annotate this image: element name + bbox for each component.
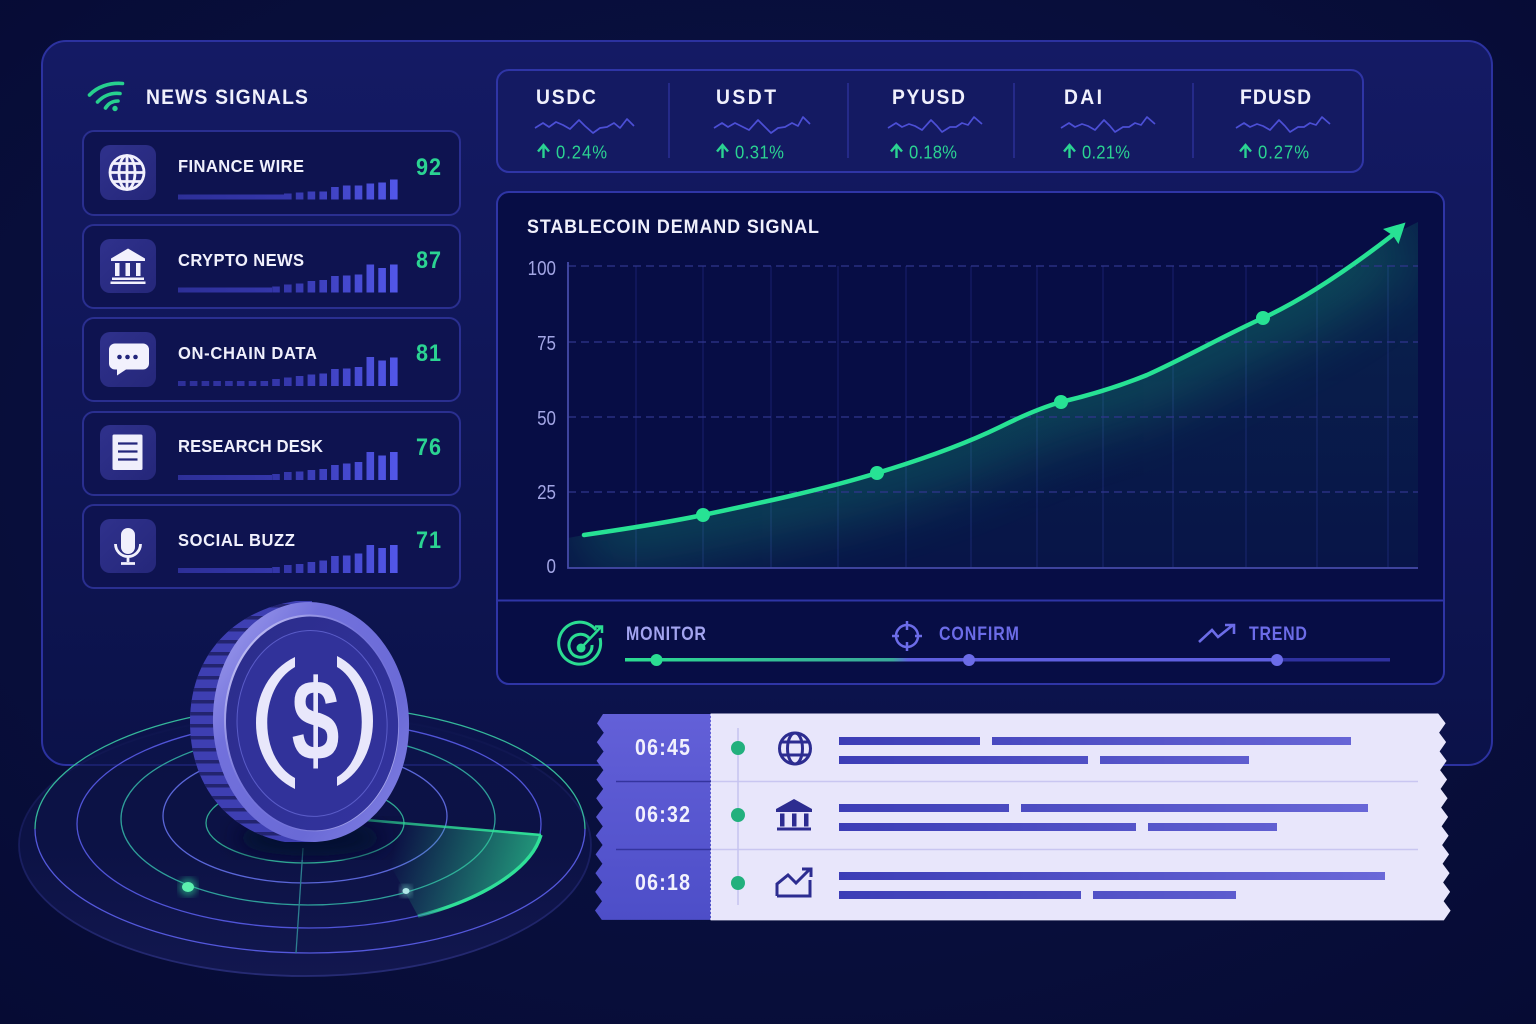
ticker: USDT: 0.31% <box>735 142 784 163</box>
row: finance wire: 92 <box>416 153 441 180</box>
icon: timeline chart <box>777 869 811 896</box>
icon: bank <box>110 248 146 284</box>
redacted text lines <box>839 737 1385 899</box>
USDC coin <box>185 597 415 847</box>
icon: microphone <box>116 528 140 564</box>
row: social buzz: SOCIAL BUZZ <box>178 529 295 550</box>
line chart <box>528 220 1418 577</box>
area under curve <box>568 220 1418 568</box>
timestamp tab <box>595 714 711 920</box>
bar sparkline: on-chain data <box>178 357 398 386</box>
ticker: FDUSD <box>1236 86 1330 163</box>
icon: crosshair <box>892 621 922 651</box>
ticker: USDC: 0.24% <box>556 142 607 163</box>
row: on-chain data: 81 <box>416 339 441 366</box>
ticker: DAI <box>1061 86 1155 163</box>
row: on-chain data: ON-CHAIN DATA <box>178 342 317 363</box>
ticker: PYUSD: PYUSD <box>892 86 965 109</box>
demand curve with arrow <box>584 222 1406 535</box>
icon: wifi signal <box>90 83 122 111</box>
panel: stablecoin ticker <box>497 70 1363 172</box>
coin symbol: $ <box>292 656 339 785</box>
row: crypto news <box>83 225 460 308</box>
ticker: DAI: DAI <box>1064 86 1102 109</box>
row: social buzz <box>83 505 460 588</box>
radar sweep <box>366 820 541 916</box>
ticker: DAI: 0.21% <box>1082 142 1130 163</box>
bar sparkline: crypto news <box>178 264 398 292</box>
row: on-chain data <box>83 318 460 401</box>
row: research desk: 76 <box>416 433 441 460</box>
icon: target <box>559 622 602 664</box>
news timeline ticket: 06:32 <box>635 802 690 827</box>
ticker: PYUSD: 0.18% <box>909 142 957 163</box>
news timeline ticket: 06:18 <box>635 870 690 895</box>
coin shadow <box>235 820 385 856</box>
ticker: USDT: USDT <box>716 86 777 109</box>
news timeline ticket: 06:45 <box>635 735 690 760</box>
news timeline ticket <box>595 714 1450 920</box>
ticker: USDC <box>535 86 634 163</box>
row: finance wire <box>83 131 460 215</box>
row: research desk: RESEARCH DESK <box>178 435 323 456</box>
step tracker: monitor confirm trend: TREND <box>1249 623 1307 644</box>
step tracker: monitor confirm trend: CONFIRM <box>939 623 1019 644</box>
ticker: PYUSD <box>888 86 982 163</box>
panel: stablecoin demand chart <box>497 192 1444 684</box>
bar sparkline: social buzz <box>178 545 398 573</box>
icon: trend arrow <box>1199 625 1234 642</box>
row: finance wire: FINANCE WIRE <box>178 155 304 176</box>
radar blips <box>179 878 412 897</box>
heading: news signals: NEWS SIGNALS <box>146 86 308 109</box>
panel: news signals <box>83 83 460 588</box>
axis labels: 50 <box>537 407 556 429</box>
axis labels <box>528 257 556 577</box>
row: research desk <box>83 412 460 495</box>
ticker: FDUSD: 0.27% <box>1258 142 1309 163</box>
axis labels: 75 <box>537 332 556 354</box>
step tracker: monitor confirm trend: MONITOR <box>626 623 706 644</box>
row: social buzz: 71 <box>416 526 441 553</box>
ticker: FDUSD: FDUSD <box>1240 86 1311 109</box>
icon: chat bubble <box>109 344 149 376</box>
icon: document <box>112 434 142 470</box>
icon: globe <box>110 156 144 190</box>
row: crypto news: 87 <box>416 246 441 273</box>
bar sparkline: finance wire <box>178 180 398 200</box>
ticker: USDC: USDC <box>536 86 596 109</box>
axis labels: 100 <box>528 257 556 279</box>
chart title: STABLECOIN DEMAND SIGNAL <box>527 215 819 237</box>
radar rings <box>35 705 585 953</box>
icon: timeline bank <box>776 799 812 830</box>
ticker: USDT <box>714 86 810 163</box>
coin face <box>207 597 415 847</box>
coin symbol <box>256 656 373 789</box>
radar platform <box>19 705 591 976</box>
row: crypto news: CRYPTO NEWS <box>178 249 304 270</box>
coin edge <box>185 598 315 846</box>
icon: timeline globe <box>780 733 810 764</box>
axis labels: 0 <box>547 555 556 577</box>
axis labels: 25 <box>537 481 556 503</box>
step tracker: monitor confirm trend <box>559 621 1390 666</box>
bar sparkline: research desk <box>178 452 398 480</box>
main dashboard panel <box>42 41 1492 765</box>
